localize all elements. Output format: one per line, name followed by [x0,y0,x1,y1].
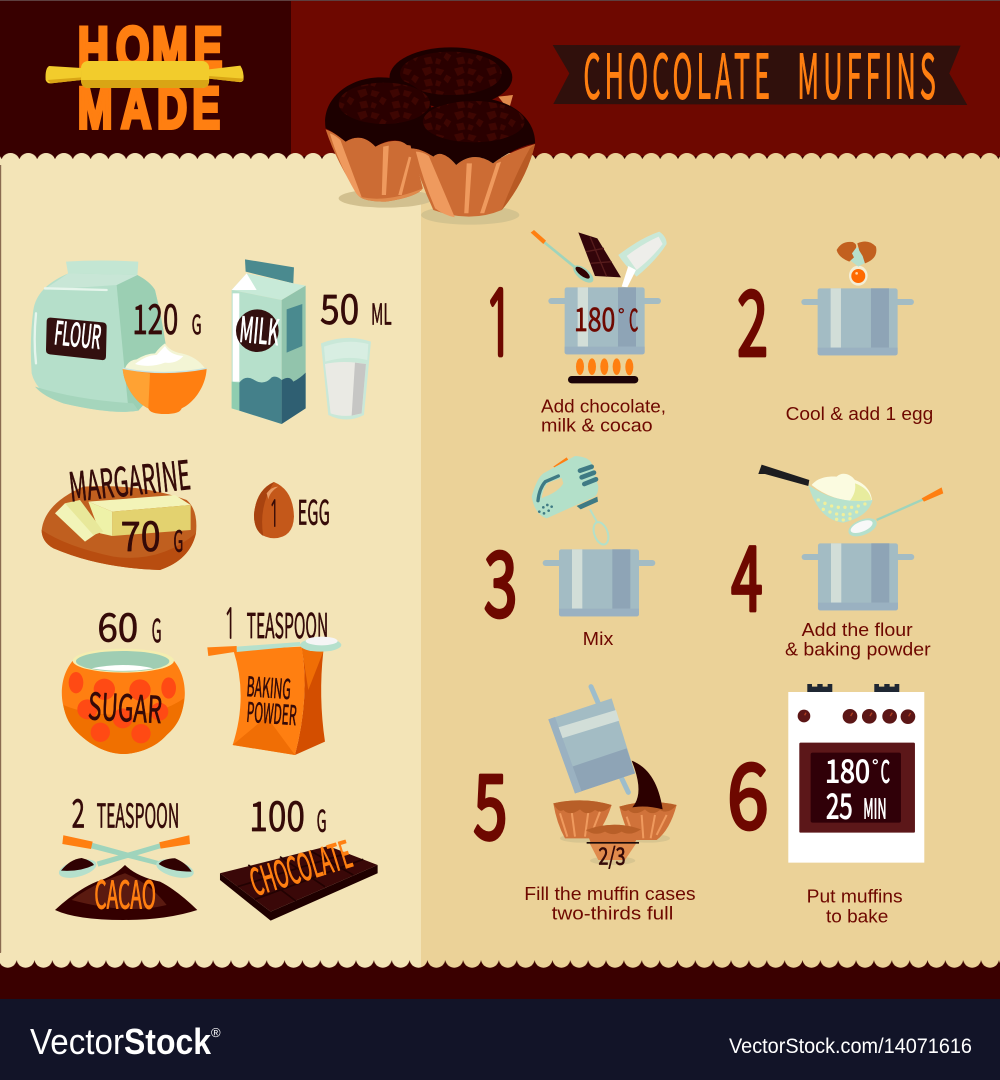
icon: glass pouring milk [618,232,667,287]
caption step 1: milk & cocao [541,415,653,436]
panel: ingredients lower: G [152,607,162,652]
icon: oven: C [881,747,890,791]
logo: vectorstock [30,1021,221,1062]
step number 2: 2 [737,252,768,382]
caption step 6: to bake [826,905,888,926]
caption step 2: Cool & add 1 egg [786,403,933,424]
label: flour [46,308,107,360]
icon: tilted pot [548,687,635,793]
step number 4: 4 [731,507,763,637]
icon: margarine on board [42,486,196,570]
panel: steps 1 and 2 [484,230,933,436]
icon: chocolate bar falling [578,232,621,277]
icon: pot on stove: C [629,296,638,340]
amount: 1 teaspoon: 1 [224,603,236,644]
caption step 5 [524,883,696,923]
icon: glass of milk [321,338,371,419]
icon: chocolate bar [220,824,378,921]
amount: 120 g: 120 [132,286,178,346]
oven display: 25 [826,778,853,828]
icon: spoon of baking powder [846,487,943,540]
caption step 5: two-thirds full [552,902,673,923]
icon: milk carton [232,259,306,424]
icon: muffin cases with pouring pot [553,761,677,871]
amount: 2 teaspoon [72,782,179,839]
caption step 1 [541,395,666,436]
panel: steps 3 and 4 [484,456,943,660]
logo: vectorstock: Vector [30,1021,124,1062]
icon: sieve with flour [758,465,873,523]
heading: home: HOME [78,16,222,83]
icon: egg [254,482,294,538]
step number 1: 1 [484,279,514,368]
amount: 100 g: 100 [249,783,305,843]
amount: 50 ml [320,276,392,336]
panel: ingredients lower: TEASPOON [247,599,328,648]
caption step 4: & baking powder [785,639,931,660]
label: sugar: SUGAR [87,676,163,734]
banner: chocolate muffins title [553,27,967,116]
icon: oven [788,684,924,863]
caption step 4 [785,619,931,660]
temperature 180 c: 180 [574,295,615,341]
url: VectorStock.com/14071616 [729,1035,972,1058]
label: flour: FLOUR [52,308,103,359]
amount: 60 g: 60 [97,597,138,654]
icon: spoon of cocoa [531,230,596,286]
amount: 60 g [97,597,162,654]
logo: vectorstock: ® [211,1025,221,1040]
amount: 120 g: G [192,305,202,342]
icon: baking powder bag: POWDER [245,691,298,733]
panel: ingredients lower [55,597,378,921]
amount: 70 g: 70 [121,503,161,563]
amount: 1 teaspoon [224,599,328,648]
caption step 6: Put muffins [807,886,903,907]
heading: made: MADE [78,75,220,141]
title word: muffins: MUFFINS [797,27,936,116]
label: two thirds: 2/3 [598,837,626,871]
panel: ingredients lower: TEASPOON [97,789,179,837]
logo: home made with rolling pin [46,16,244,141]
caption step 5: Fill the muffin cases [524,883,696,904]
icon: teaspoon of baking powder [207,637,341,656]
label: chocolate: CHOCOLATE [242,824,358,906]
panel: steps 5 and 6 [473,684,924,926]
oven display: 180 [825,747,870,792]
logo: vectorstock: Stock [124,1021,212,1062]
label: baking powder [245,665,298,733]
icon: egg: 1 [269,497,279,533]
caption step 6 [807,886,903,926]
amount: 70 g: G [173,519,183,561]
icon: sugar bowl [62,649,185,754]
panel: ingredients lower: G [317,798,327,841]
icon: bowl of flour [123,343,207,414]
step number 3: 3 [484,513,517,643]
caption step 1: Add chocolate, [541,395,666,416]
label: cacao: CACAO [94,865,156,920]
label: milk: MILK [238,302,281,356]
footer watermark [30,1021,972,1062]
icon: crossed spoons and cacao pile [55,835,197,920]
panel: ingredients upper [31,259,392,570]
title word: chocolate: CHOCOLATE [583,27,770,116]
icon: cracked egg [837,241,876,286]
panel: header [0,0,1000,164]
icon: flour bag [31,260,166,412]
step number 5: 5 [473,735,507,865]
label: baking powder: BAKING [245,665,292,707]
amount: 50 ml: ML [371,292,392,334]
amount: 50 ml: 50 [320,276,359,336]
panel: ingredients upper: EGG [298,485,330,534]
caption step 4: Add the flour [802,619,913,640]
icon: pot [801,288,914,355]
oven display [825,747,890,828]
oven display: MIN [863,786,887,826]
label: margarine: MARGARINE [66,443,193,514]
step number 6: 6 [727,724,769,854]
icon: hand mixer [532,456,611,547]
icon: three chocolate muffins [325,47,535,225]
icon: pot [543,549,655,616]
icon: pot [802,543,914,610]
amount: 2 teaspoon: 2 [72,782,85,839]
icon: pot on stove [548,287,661,383]
scalloped bottom edge [0,950,1000,970]
icon: rolling pin [46,61,244,88]
caption step 3: Mix [583,628,614,649]
icon: baking powder bag [233,647,325,755]
